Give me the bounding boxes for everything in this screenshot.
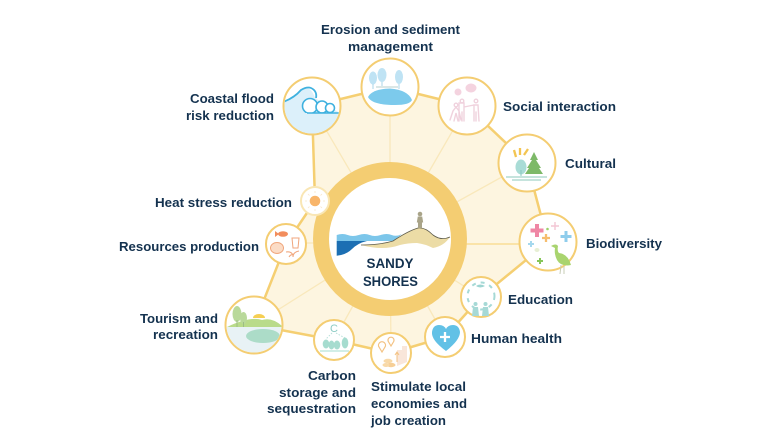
label: carbon storage and sequestration: sequestration xyxy=(267,401,356,416)
label: heat stress reduction: Heat stress reduction xyxy=(155,195,292,210)
label: erosion and sediment management: management xyxy=(348,39,434,54)
icon: coastal flood xyxy=(283,78,341,137)
heading: sandy shores: SHORES xyxy=(363,274,418,289)
label: carbon storage and sequestration: Carbon xyxy=(308,368,356,383)
icon: person xyxy=(417,212,423,228)
label: resources production: Resources production xyxy=(119,239,259,254)
label: coastal flood risk reduction: Coastal flood xyxy=(190,91,274,106)
heading: sandy shores xyxy=(363,256,418,289)
label: erosion and sediment management xyxy=(321,22,461,54)
icon: shore cross-section xyxy=(337,212,450,256)
icon: carbon storage: C xyxy=(330,323,338,335)
icon: biodiversity xyxy=(520,214,576,274)
central ring: sandy shores xyxy=(321,170,459,308)
label: stimulate local economies and job creation xyxy=(370,379,467,428)
label: stimulate local economies and job creation: economies and xyxy=(371,396,467,411)
icon: carbon storage xyxy=(314,320,354,360)
label: cultural: Cultural xyxy=(565,156,616,171)
label: social interaction: Social interaction xyxy=(503,99,616,114)
icon: human health xyxy=(425,317,465,357)
icon: resources production xyxy=(266,224,306,264)
label: human health: Human health xyxy=(471,331,562,346)
label: coastal flood risk reduction xyxy=(186,91,274,123)
label: carbon storage and sequestration: storage and xyxy=(279,385,356,400)
icon: cultural xyxy=(498,134,556,192)
label: education: Education xyxy=(508,292,573,307)
label: stimulate local economies and job creation: job creation xyxy=(370,413,446,428)
label: biodiversity: Biodiversity xyxy=(586,236,663,251)
label: carbon storage and sequestration xyxy=(267,368,356,416)
label: tourism and recreation xyxy=(140,311,218,342)
label: tourism and recreation: Tourism and xyxy=(140,311,218,326)
heading: sandy shores: SANDY xyxy=(366,256,414,271)
icon: erosion and sediment xyxy=(362,58,418,116)
icon: education xyxy=(461,277,501,317)
panel: cream polygon background xyxy=(254,87,548,353)
icon: tourism and recreation xyxy=(226,296,282,354)
label: tourism and recreation: recreation xyxy=(153,327,218,342)
label: coastal flood risk reduction: risk reduction xyxy=(186,108,274,123)
icon: heat stress xyxy=(301,187,329,215)
label: stimulate local economies and job creation: Stimulate local xyxy=(371,379,466,394)
icon: stimulate local economies xyxy=(371,333,411,373)
icon: social interaction xyxy=(438,78,496,134)
label: erosion and sediment management: Erosion and sediment xyxy=(321,22,461,37)
